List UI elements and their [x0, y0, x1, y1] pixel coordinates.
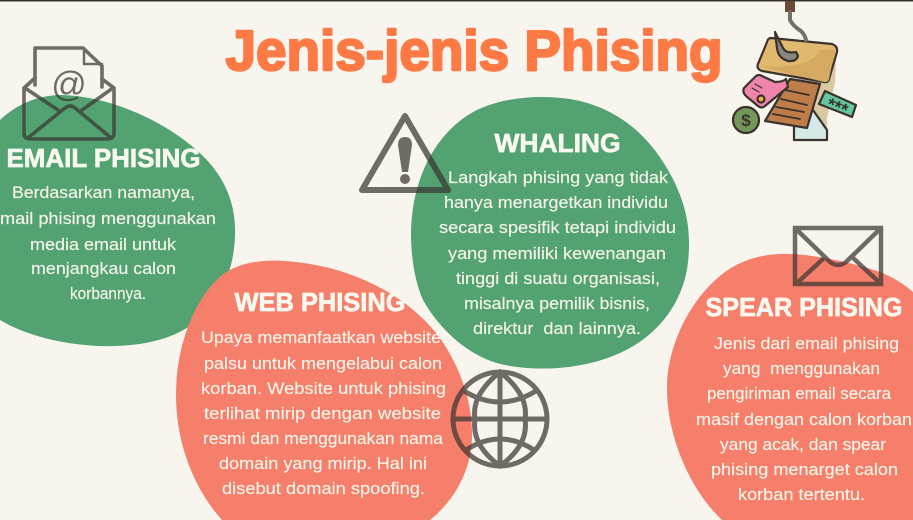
text: spear phising [696, 292, 912, 504]
blob: spear panel [667, 254, 913, 520]
text: email phising: Berdasarkan namanya, [12, 184, 195, 202]
document [765, 79, 820, 128]
blob: web panel [176, 261, 472, 520]
pink card [743, 75, 788, 108]
icon: phishing hook with stolen data: $ [741, 111, 751, 130]
text: spear phising: yang menggunakan [723, 360, 880, 378]
icon: globe [453, 372, 547, 466]
text: whaling: secara spesifik tetapi individu [439, 219, 676, 237]
text: web phising: korban. Website untuk phising [201, 380, 446, 398]
hook line [785, 1, 795, 12]
text: whaling: misalnya pemilik bisnis, [464, 295, 650, 313]
text: spear phising: Jenis dari email phising [714, 335, 899, 353]
text: email phising: mail phising menggunakan [0, 210, 216, 228]
text: web phising: Upaya memanfaatkan website [201, 329, 441, 347]
icon: open envelope with at sign: @ [51, 65, 87, 104]
icon: warning triangle [362, 116, 448, 190]
password tag [819, 91, 856, 117]
text: web phising: domain yang mirip. Hal ini [219, 455, 427, 473]
icon: phishing hook with stolen data: *** [824, 94, 851, 120]
text: spear phising: masif dengan calon korban [696, 411, 912, 429]
text: spear phising: phising menarget calon [711, 461, 898, 479]
text: whaling: direktur dan lainnya. [473, 320, 641, 338]
hook [790, 12, 806, 40]
dollar coin [733, 107, 759, 133]
text: web phising: terlihat mirip dengan website [204, 405, 441, 423]
text: spear phising: SPEAR PHISING [706, 292, 902, 322]
text: web phising: palsu untuk mengelabui calon [204, 355, 442, 373]
text: whaling: tinggi di suatu organisasi, [456, 270, 660, 288]
blob: email panel [0, 95, 235, 346]
blob: whaling panel [411, 97, 689, 369]
text: email phising: EMAIL PHISING [6, 143, 200, 173]
wallet [758, 38, 837, 82]
text: web phising: resmi dan menggunakan nama [203, 430, 444, 448]
text: email phising: menjangkau calon [31, 260, 176, 278]
text: whaling: WHALING [494, 128, 620, 158]
text: email phising: korbannya. [70, 285, 146, 303]
text: spear phising: yang acak, dan spear [720, 436, 887, 454]
icon: closed envelope [795, 228, 881, 284]
text: web phising: disebut domain spoofing. [222, 480, 425, 498]
envelope back [794, 60, 836, 140]
icon: open envelope with at sign [24, 48, 114, 139]
text: spear phising: korban tertentu. [738, 486, 865, 504]
text: whaling: yang memiliki kewenangan [448, 245, 666, 263]
text: spear phising: pengiriman email secara [707, 385, 892, 403]
text: email phising: media email untuk [30, 236, 177, 254]
text: whaling [439, 128, 676, 338]
title: Jenis-jenis Phising [226, 19, 722, 83]
text: email phising [0, 143, 216, 303]
text: whaling: hanya menargetkan individu [444, 194, 668, 212]
text: web phising [201, 287, 446, 498]
text: web phising: WEB PHISING [234, 287, 406, 317]
text: whaling: Langkah phising yang tidak [448, 169, 669, 187]
icon: phishing hook with stolen data [733, 1, 856, 140]
